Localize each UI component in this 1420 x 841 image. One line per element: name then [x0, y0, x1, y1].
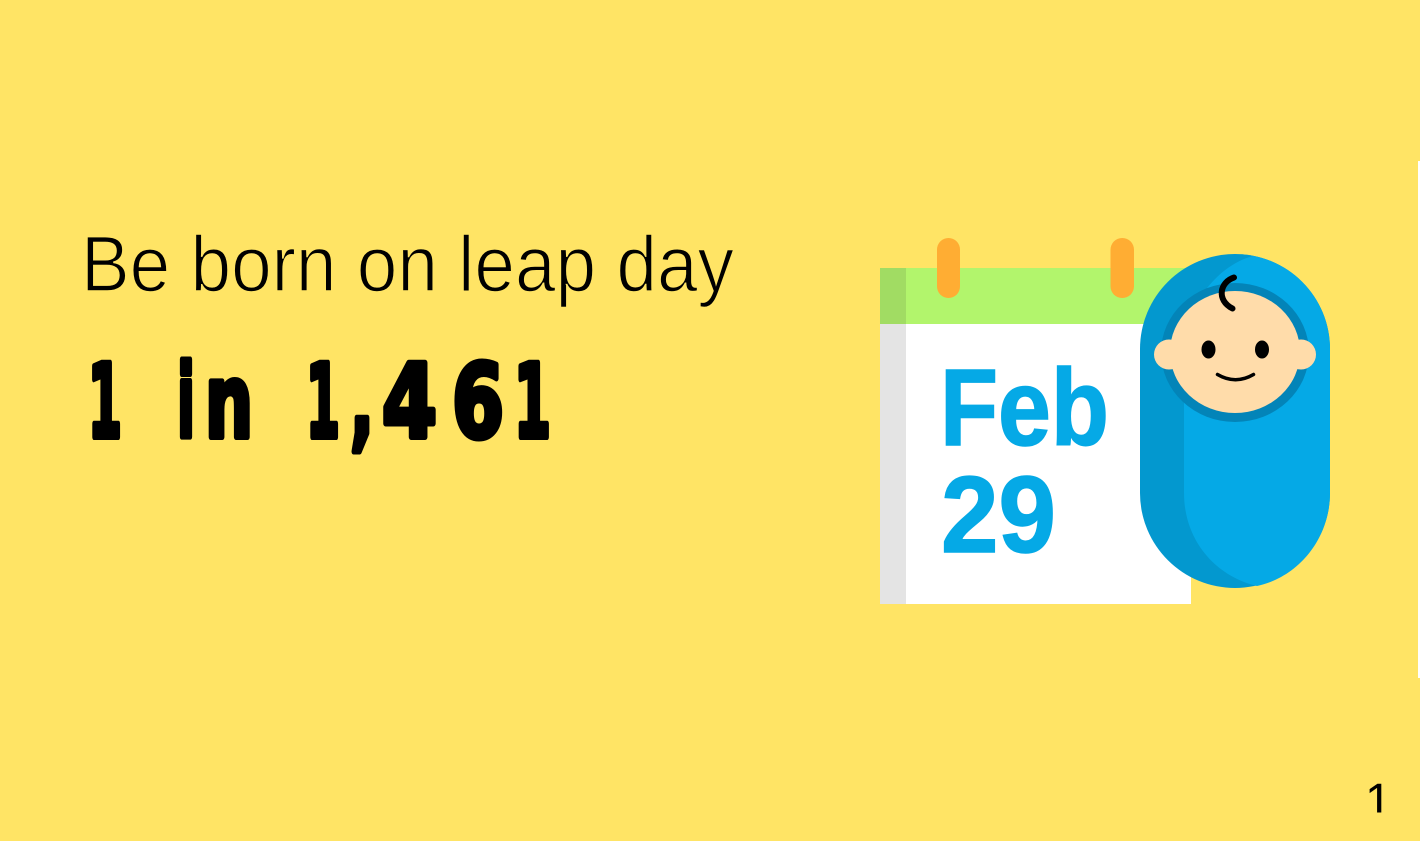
statistic: 1 in 1,461: 6	[452, 343, 504, 462]
statistic: 1 in 1,461: 1	[514, 343, 551, 462]
statistic: 1 in 1,461: ,	[350, 343, 374, 462]
icon: swaddled baby	[1140, 254, 1330, 588]
statistic: 1 in 1,461: 4	[382, 343, 437, 462]
statistic: 1 in 1,461	[88, 343, 551, 462]
statistic: 1 in 1,461: 1	[306, 343, 340, 462]
date text: Feb 29: 29	[941, 454, 1056, 576]
icon: calendar page	[880, 238, 1191, 604]
date text: Feb 29: Feb	[940, 347, 1109, 469]
statistic: 1 in 1,461: n	[205, 343, 253, 462]
statistic: 1 in 1,461: 1	[88, 343, 122, 462]
date text: Feb 29	[940, 347, 1109, 576]
heading: Be born on leap day: Be born on leap day	[81, 219, 734, 308]
page number: 1	[1365, 775, 1392, 828]
statistic: 1 in 1,461: i	[177, 343, 195, 462]
